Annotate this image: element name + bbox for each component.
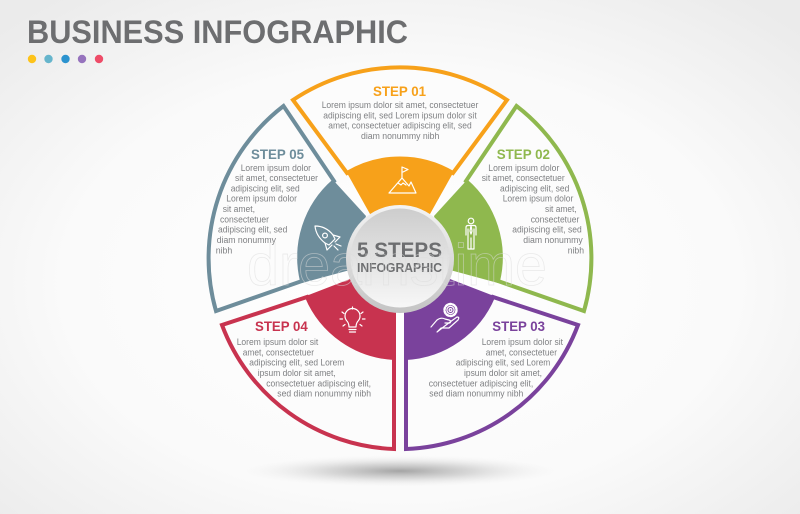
text: step 05 body: adipiscing elit, sed bbox=[218, 225, 287, 235]
title: BUSINESS INFOGRAPHIC bbox=[27, 14, 408, 50]
text: step 03 body bbox=[429, 337, 563, 399]
text: step 02 body bbox=[482, 163, 584, 255]
text: step 01 body: amet, consectetuer adipiscing elit, sed bbox=[328, 121, 472, 131]
text: step 05 body: nibh bbox=[216, 245, 232, 255]
panel: step 01 bbox=[293, 67, 507, 214]
centre disc bbox=[346, 205, 454, 313]
icon: person bbox=[466, 218, 476, 249]
panel: step 05 bbox=[209, 106, 366, 311]
text: step 05 body bbox=[216, 163, 318, 255]
text: step 02 body: adipiscing elit, sed bbox=[512, 225, 582, 235]
text: step 04 body bbox=[237, 337, 371, 399]
panel: step 03 bbox=[404, 279, 578, 449]
text: dreamstime bbox=[247, 233, 547, 298]
icon: light bulb bbox=[340, 307, 365, 332]
ground shadow bbox=[240, 455, 560, 487]
text: step 04 body: Lorem ipsum dolor sit bbox=[237, 337, 319, 347]
text: step 05 body: diam nonummy bbox=[217, 235, 276, 245]
text: step 02 body: sit amet, bbox=[545, 204, 577, 214]
text: step 05 body: consectetuer bbox=[220, 214, 269, 224]
heading: step 01: STEP 01 bbox=[373, 83, 426, 99]
text: step 02 body: sit amet, consectetuer bbox=[482, 173, 565, 183]
panel: step 02 bbox=[434, 106, 591, 311]
text: step 03 body: adipiscing elit, sed Lorem bbox=[456, 358, 550, 368]
centre subheading: INFOGRAPHIC bbox=[357, 261, 442, 275]
icon: mountain flag bbox=[389, 167, 416, 193]
text: step 02 body: consectetuer bbox=[531, 214, 579, 224]
text: step 04 body: adipiscing elit, sed Lorem bbox=[249, 358, 344, 368]
text: step 04 body: sed diam nonummy nibh bbox=[277, 389, 371, 399]
text: step 03 body: consectetuer adipiscing elit, bbox=[429, 378, 533, 388]
text: step 05 body: Lorem ipsum dolor bbox=[226, 194, 297, 204]
text: step 04 body: amet, consectetuer bbox=[243, 347, 314, 357]
text: step 03 body: amet, consectetuer bbox=[486, 347, 557, 357]
icon: rocket bbox=[315, 226, 341, 250]
heading: step 03: STEP 03 bbox=[492, 318, 545, 334]
heading: step 02: STEP 02 bbox=[497, 146, 550, 162]
text: step 05 body: sit amet, bbox=[223, 204, 255, 214]
text: step 03 body: sed diam nonummy nibh bbox=[429, 389, 523, 399]
text: step 01 body bbox=[322, 100, 478, 141]
centre heading: 5 STEPS bbox=[357, 239, 442, 262]
panel: step 04 bbox=[222, 279, 396, 449]
text: step 04 body: ipsum dolor sit amet, bbox=[258, 368, 336, 378]
text: step 05 body: adipiscing elit, sed bbox=[231, 183, 300, 193]
icon: hand with gear bbox=[431, 304, 459, 332]
text: step 05 body: sit amet, consectetuer bbox=[235, 173, 318, 183]
text: step 01 body: adipiscing elit, sed Lorem ipsum dolor sit bbox=[323, 110, 477, 120]
text: step 02 body: Lorem ipsum dolor bbox=[503, 194, 573, 204]
text: step 05 body: Lorem ipsum dolor bbox=[241, 163, 311, 173]
text: step 02 body: diam nonummy bbox=[523, 235, 583, 245]
text: step 03 body: ipsum dolor sit amet, bbox=[464, 368, 542, 378]
text: step 01 body: diam nonummy nibh bbox=[361, 131, 439, 141]
text: step 02 body: Lorem ipsum dolor bbox=[488, 163, 559, 173]
text: step 03 body: Lorem ipsum dolor sit bbox=[482, 337, 563, 347]
text: step 01 body: Lorem ipsum dolor sit amet, consectetuer bbox=[322, 100, 478, 110]
heading: step 04: STEP 04 bbox=[255, 318, 308, 334]
text: step 02 body: nibh bbox=[568, 245, 584, 255]
colour dots bbox=[28, 55, 103, 63]
heading: step 05: STEP 05 bbox=[251, 146, 304, 162]
text: step 04 body: consectetuer adipiscing elit, bbox=[266, 378, 371, 388]
text: step 02 body: adipiscing elit, sed bbox=[500, 183, 569, 193]
